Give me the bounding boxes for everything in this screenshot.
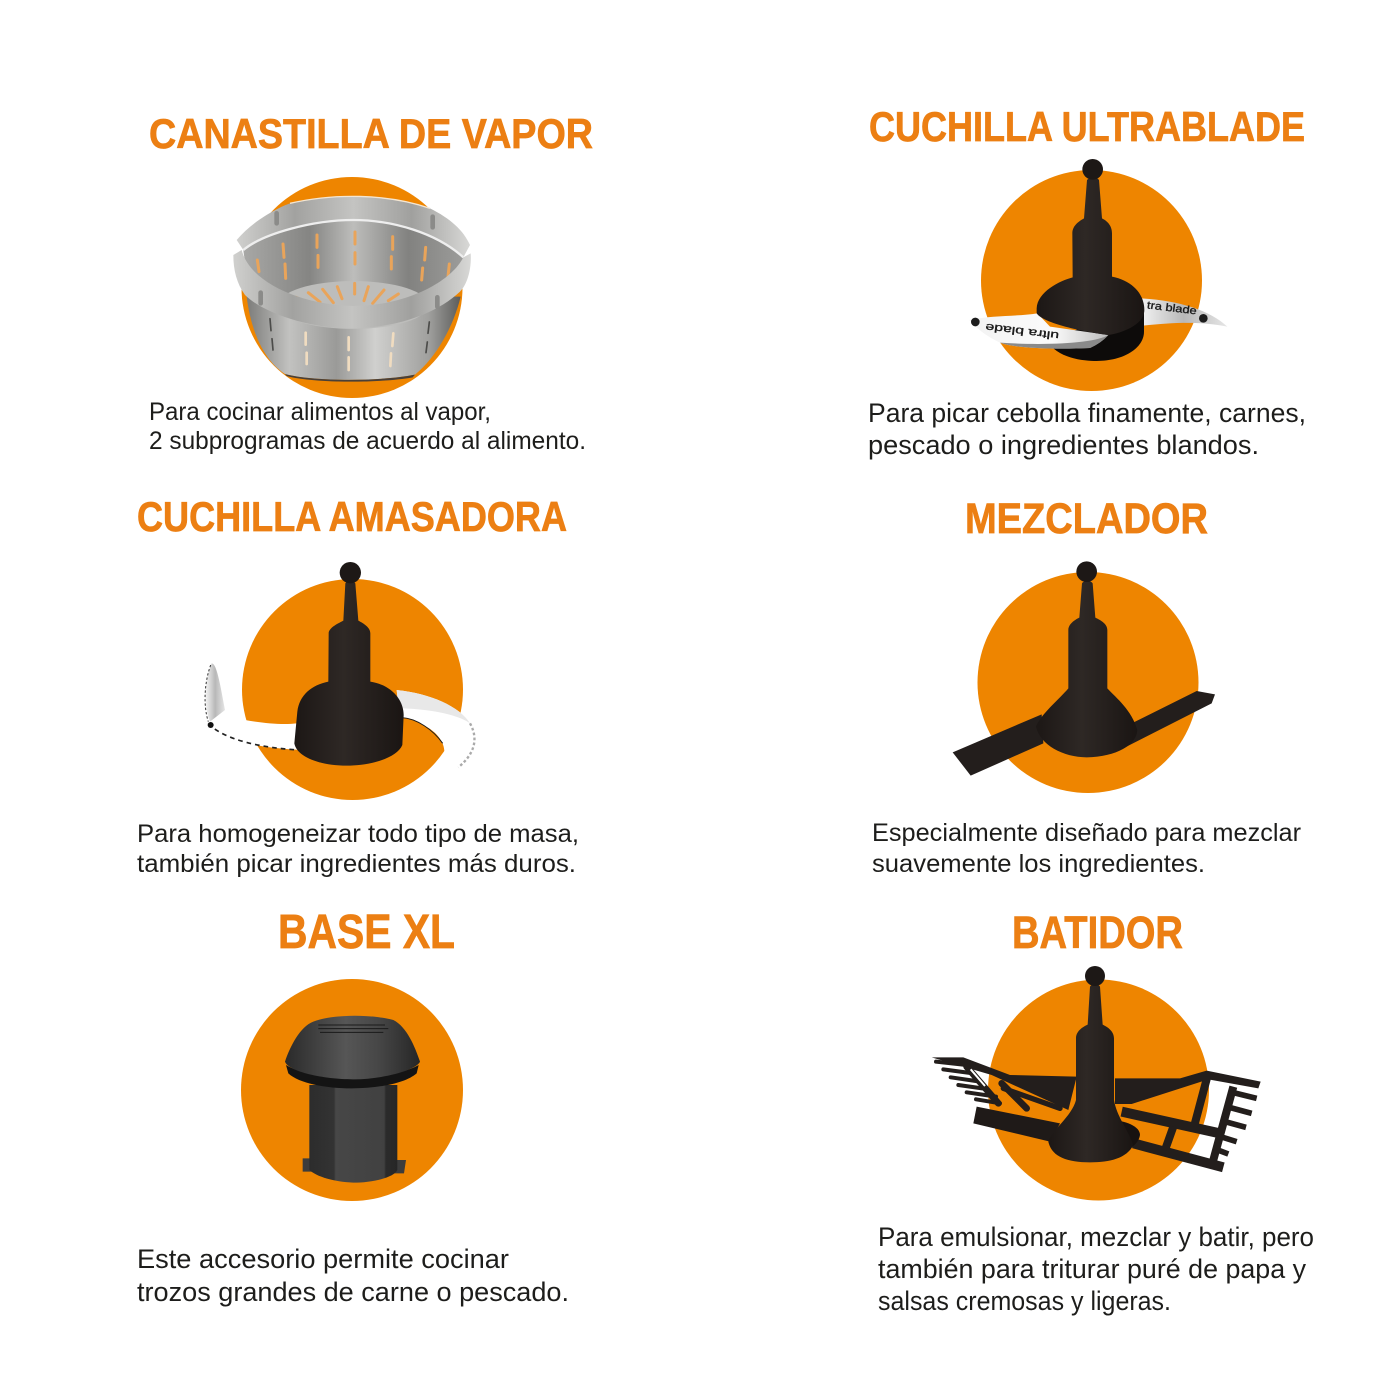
heading: base xl: BASE XL xyxy=(278,906,455,959)
description: batidor: también para triturar puré de papa y xyxy=(878,1254,1306,1284)
icon: base xl accessory xyxy=(285,1016,420,1183)
description: base xl: trozos grandes de carne o pescado. xyxy=(137,1277,569,1307)
description: canastilla de vapor: Para cocinar alimentos al vapor, xyxy=(149,398,491,426)
heading: mezclador: MEZCLADOR xyxy=(965,495,1208,543)
icon: mixer paddle xyxy=(953,561,1215,776)
orange circle xyxy=(242,579,463,800)
panel: cuchilla amasadora xyxy=(137,493,579,878)
panel: cuchilla ultrablade xyxy=(868,103,1306,460)
orange circle xyxy=(981,170,1202,391)
description: cuchilla amasadora xyxy=(137,820,579,878)
heading: batidor: BATIDOR xyxy=(1012,907,1183,958)
icon: whisk attachment xyxy=(932,966,1261,1167)
description: cuchilla amasadora: Para homogeneizar todo tipo de masa, xyxy=(137,820,579,848)
panel: base xl xyxy=(137,906,569,1307)
description: canastilla de vapor: 2 subprogramas de acuerdo al alimento. xyxy=(149,427,586,455)
description: base xl: Este accesorio permite cocinar xyxy=(137,1244,509,1274)
orange circle xyxy=(242,177,462,398)
heading: cuchilla amasadora: CUCHILLA AMASADORA xyxy=(137,493,567,540)
orange circle xyxy=(241,979,463,1201)
description: mezclador: suavemente los ingredientes. xyxy=(872,850,1205,878)
icon: ultrablade blade: tra blade xyxy=(1146,299,1197,317)
panel: canastilla de vapor xyxy=(149,110,593,455)
description: base xl xyxy=(137,1244,569,1307)
description: mezclador xyxy=(872,819,1301,878)
icon: steamer basket xyxy=(233,196,471,382)
description: batidor: Para emulsionar, mezclar y batir, pero xyxy=(878,1222,1314,1252)
description: cuchilla amasadora: también picar ingredientes más duros. xyxy=(137,850,576,878)
description: batidor: salsas cremosas y ligeras. xyxy=(878,1286,1171,1316)
description: cuchilla ultrablade: Para picar cebolla finamente, carnes, xyxy=(868,398,1306,428)
panel: mezclador xyxy=(872,495,1301,878)
description: canastilla de vapor xyxy=(149,398,586,455)
description: cuchilla ultrablade: pescado o ingredientes blandos. xyxy=(868,430,1259,460)
icon: ultrablade blade: ultra blade xyxy=(985,321,1060,342)
description: mezclador: Especialmente diseñado para mezclar xyxy=(872,819,1301,847)
orange circle xyxy=(988,980,1209,1200)
orange circle xyxy=(978,572,1198,793)
description: batidor xyxy=(878,1222,1314,1316)
icon: kneading blade xyxy=(205,562,474,767)
description: cuchilla ultrablade xyxy=(868,398,1306,460)
icon: ultrablade blade xyxy=(969,159,1227,361)
heading: canastilla de vapor: CANASTILLA DE VAPOR xyxy=(149,110,593,157)
panel: batidor xyxy=(878,907,1314,1316)
heading: cuchilla ultrablade: CUCHILLA ULTRABLADE xyxy=(869,103,1305,150)
